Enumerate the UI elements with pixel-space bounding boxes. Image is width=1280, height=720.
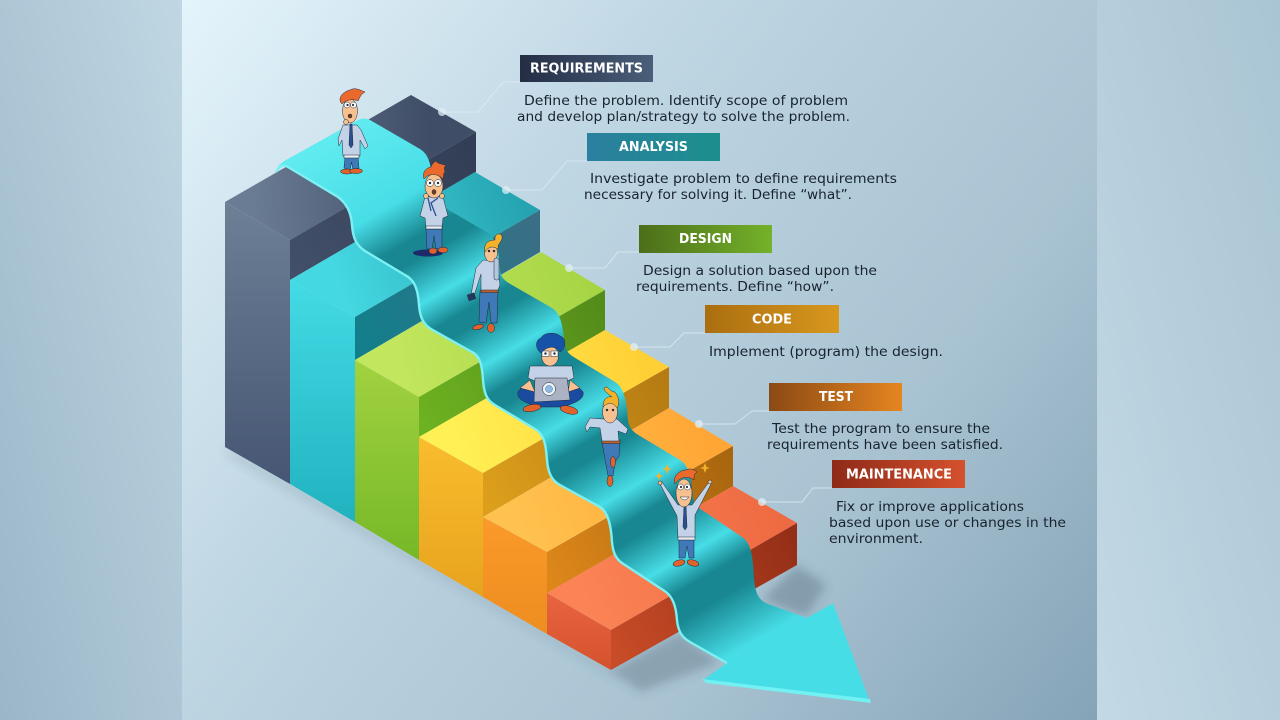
block: maintenance (red): [547, 486, 797, 670]
text: test description: requirements have been satisfied.: [767, 437, 1003, 453]
text: analysis description: necessary for solving it. Define “what”.: [584, 187, 852, 203]
text: requirements description: and develop plan/strategy to solve the problem.: [517, 109, 850, 125]
connector dots: [438, 108, 766, 506]
arrow bottom edge: [702, 679, 871, 703]
connector lines: [442, 82, 832, 502]
text: code description: Implement (program) the design.: [709, 344, 943, 360]
label: test: [769, 383, 902, 411]
block: design (green): [355, 252, 605, 560]
text: requirements description: [517, 93, 850, 125]
label: analysis: ANALYSIS: [619, 140, 688, 155]
label: maintenance: MAINTENANCE: [846, 468, 952, 482]
label: requirements: REQUIREMENTS: [530, 62, 643, 76]
text: design description: Design a solution based upon the: [643, 263, 877, 279]
text: design description: [636, 263, 877, 295]
character: running woman: [585, 387, 628, 486]
sparkles: [655, 463, 710, 480]
label: requirements: [520, 55, 653, 82]
character: seated man with laptop: [518, 333, 583, 416]
label: analysis: [587, 133, 720, 161]
block: analysis (cyan): [290, 172, 540, 522]
ground shadows: [225, 447, 826, 692]
text: test description: [767, 421, 1003, 453]
text: requirements description: Define the problem. Identify scope of problem: [524, 93, 848, 109]
label: code: [705, 305, 839, 333]
character: thinking man: [338, 89, 368, 174]
staircase blocks: [225, 95, 797, 670]
ribbon left edge highlight: [276, 166, 727, 663]
label: test: TEST: [819, 390, 853, 405]
text: maintenance description: environment.: [829, 531, 923, 547]
block: code (yellow): [419, 330, 669, 597]
text: maintenance description: Fix or improve applications: [836, 499, 1024, 515]
text: analysis description: Investigate problem to define requirements: [590, 171, 897, 187]
text: test description: Test the program to ensure the: [771, 421, 990, 437]
character: woman thinking: [467, 234, 502, 332]
ribbon arrow: [276, 118, 871, 703]
character: celebrating man: [655, 463, 712, 567]
block: requirements (slate): [225, 95, 476, 484]
text: maintenance description: based upon use or changes in the: [829, 515, 1066, 531]
block: test (orange): [483, 408, 733, 634]
label: code: CODE: [752, 312, 792, 328]
label: design: DESIGN: [679, 232, 732, 247]
text: analysis description: [584, 171, 897, 203]
character: worried man: [413, 161, 448, 256]
label: maintenance: [832, 460, 965, 488]
text: design description: requirements. Define “how”.: [636, 279, 834, 295]
text: maintenance description: [829, 499, 1066, 547]
label: design: [639, 225, 772, 253]
